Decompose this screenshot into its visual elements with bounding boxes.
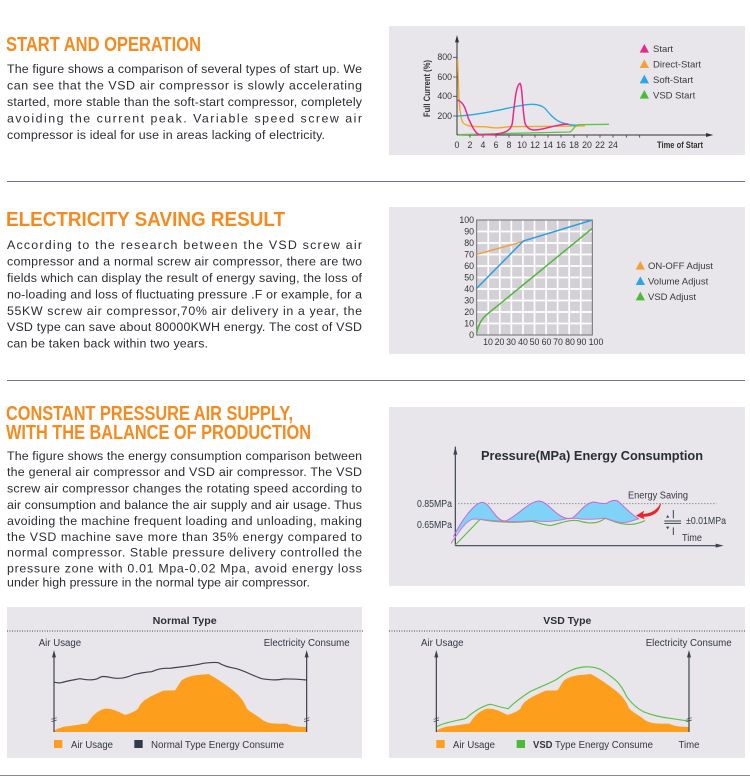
section: electricity saving result — [6, 207, 745, 354]
axis labels: start-up: 18 — [569, 140, 579, 150]
panel title: normal type: Normal Type — [153, 615, 217, 627]
text block: constant pressure air supply: avoiding the machine frequent loading and unloading, making — [7, 514, 362, 528]
panel: VSD type chart — [389, 607, 745, 758]
axis labels: start-up: 12 — [530, 140, 540, 150]
chart labels: pressure — [417, 490, 726, 544]
axis labels: energy adjust: 20 — [464, 307, 474, 317]
panel: energy adjust chart — [389, 207, 745, 354]
text block: electricity saving result: VSD type can save about 80000KWH energy. The cost of VSD — [7, 320, 362, 334]
text block: electricity saving result: can be taken back within two years. — [7, 336, 208, 350]
labels: VSD type — [421, 638, 732, 751]
labels: normal type: Electricity Consume — [264, 638, 350, 649]
grid and curves: energy adjust — [477, 220, 645, 335]
heading: electricity saving result: ELECTRICITY SAVING RESULT — [6, 209, 285, 231]
heading: start and operation: START AND OPERATION — [6, 34, 201, 56]
panel: start-up line chart — [389, 26, 745, 155]
text block: electricity saving result: According to the research between the VSD screw air — [7, 238, 362, 252]
text block: start and operation: started, more stable than the soft-start compressor, completely — [7, 95, 363, 109]
panel: normal type chart — [7, 607, 363, 758]
axis labels: start-up: 200 — [437, 111, 452, 121]
chart labels: pressure: ±0.01MPa — [686, 516, 726, 527]
axis labels: start-up: 0 — [455, 140, 460, 150]
axis labels: start-up: 20 — [582, 140, 592, 150]
text block: electricity saving result: fields which can display the result of energy saving, the loss of — [7, 271, 363, 285]
axis labels: start-up — [422, 52, 703, 150]
heading: constant pressure air supply: WITH THE BALANCE OF PRODUCTION — [6, 422, 311, 444]
axis labels: energy adjust: 90 — [577, 337, 586, 347]
text block: constant pressure air supply: normal compressor. Stable pressure delivery controlled the — [7, 546, 362, 560]
axis labels: start-up: 16 — [556, 140, 566, 150]
axis labels: energy adjust: 40 — [464, 284, 474, 294]
text block: constant pressure air supply — [7, 449, 362, 590]
legend: energy adjust: ON-OFF Adjust — [648, 261, 713, 272]
labels: VSD type: Air Usage — [453, 740, 495, 751]
labels: normal type: Air Usage — [71, 740, 113, 751]
labels: normal type: Normal Type Energy Consume — [151, 740, 284, 751]
axis labels: energy adjust: 60 — [464, 261, 474, 271]
labels: VSD type: Electricity Consume — [646, 638, 732, 649]
axis labels: start-up: 2 — [468, 140, 473, 150]
axis labels: start-up: 14 — [543, 140, 553, 150]
axis labels: energy adjust — [459, 215, 603, 347]
axis labels: energy adjust: 10 — [483, 337, 493, 347]
panel: pressure and energy consumption chart — [389, 407, 745, 586]
text block: start and operation: The figure shows a comparison of several types of start up. We — [7, 62, 362, 76]
heading: constant pressure air supply: CONSTANT PRESSURE AIR SUPPLY, — [6, 403, 293, 425]
chart curves and axes: VSD type — [434, 650, 692, 748]
axis labels: start-up: 22 — [595, 140, 605, 150]
axis labels: start-up: 4 — [481, 140, 486, 150]
legend: energy adjust — [648, 261, 713, 303]
labels: VSD type: Time — [678, 740, 700, 751]
text block: constant pressure air supply: screw air compressor changes the rotating speed according to — [7, 482, 362, 496]
text block: electricity saving result: 55KW screw air compressor,70% air delivery in a year, the — [7, 304, 362, 318]
legend: start-up — [653, 44, 701, 102]
labels: VSD type: VSD — [533, 740, 552, 751]
chart title: Pressure(MPa) Energy Consumption — [481, 448, 703, 463]
axis labels: energy adjust: 80 — [565, 337, 575, 347]
axis labels: start-up: Time of Start — [657, 140, 703, 150]
axis labels: start-up: 24 — [608, 140, 618, 150]
text block: constant pressure air supply: pressure zone with 0.01 Mpa-0.02 Mpa, avoid energy loss — [7, 562, 362, 576]
text block: start and operation: can see that the VSD air compressor is slowly accelerating — [7, 78, 362, 92]
axis labels: start-up: Full Current (%) — [422, 60, 432, 117]
chart labels: pressure: 0.65MPa — [417, 520, 452, 531]
text block: constant pressure air supply: the general air compressor and VSD air compressor. The VSD — [7, 465, 362, 479]
legend: start-up: VSD Start — [653, 90, 696, 102]
axis labels: energy adjust: 90 — [464, 226, 474, 236]
axis labels: energy adjust: 0 — [469, 330, 474, 340]
legend: energy adjust: VSD Adjust — [648, 292, 696, 303]
axis labels: start-up: 400 — [437, 91, 452, 101]
chart labels: pressure: 0.85MPa — [417, 499, 452, 510]
chart curves and axes: pressure — [451, 447, 724, 548]
text block: constant pressure air supply: air consumption and balance the air supply and air usage. Thus — [7, 498, 362, 512]
axis labels: energy adjust: 100 — [589, 337, 603, 347]
axis labels: energy adjust: 10 — [464, 318, 474, 328]
text block: start and operation — [7, 62, 363, 142]
axis labels: energy adjust: 40 — [518, 337, 528, 347]
chart curves and axes: start-up — [453, 35, 713, 138]
labels: VSD type: Type Energy Consume — [555, 740, 653, 751]
text block: start and operation: compressor is ideal for use in areas lacking of electricity. — [7, 128, 325, 142]
axis labels: energy adjust: 50 — [530, 337, 539, 347]
section: constant pressure air supply — [6, 403, 745, 758]
heading: constant pressure air supply — [6, 403, 311, 444]
axis labels: energy adjust: 30 — [506, 337, 516, 347]
section: start and operation — [6, 26, 745, 155]
axis labels: start-up: 800 — [437, 52, 452, 62]
chart labels: pressure: Time — [682, 533, 702, 544]
text block: constant pressure air supply: The figure shows the energy consumption comparison between — [7, 449, 362, 463]
axis labels: start-up: 10 — [517, 140, 527, 150]
axis labels: start-up: 8 — [507, 140, 512, 150]
text block: start and operation: avoiding the current peak. Variable speed screw air — [7, 112, 362, 126]
legend: energy adjust: Volume Adjust — [648, 276, 709, 288]
labels: VSD type: Air Usage — [421, 638, 464, 649]
text block: constant pressure air supply: under high pressure in the normal type air compressor. — [7, 576, 310, 590]
text block: electricity saving result: compressor and a normal screw air compressor, there are two — [7, 254, 362, 268]
legend: start-up: Soft-Start — [653, 75, 693, 86]
text block: electricity saving result — [7, 238, 363, 350]
axis labels: energy adjust: 20 — [495, 337, 504, 347]
legend: start-up: Direct-Start — [653, 60, 701, 70]
axis labels: energy adjust: 60 — [542, 337, 551, 347]
axis labels: start-up: 6 — [494, 140, 499, 150]
axis labels: energy adjust: 70 — [464, 250, 474, 260]
chart labels: pressure: Energy Saving — [628, 490, 688, 502]
axis labels: energy adjust: 70 — [553, 337, 563, 347]
chart curves and axes: normal type — [51, 650, 309, 748]
legend: start-up: Start — [653, 44, 673, 55]
axis labels: energy adjust: 80 — [464, 238, 474, 248]
axis labels: start-up: 600 — [437, 72, 452, 82]
labels: normal type — [39, 638, 350, 751]
text block: electricity saving result: no-loading and loss of fluctuating pressure .F or example, for a — [7, 288, 362, 302]
panel title: VSD type: VSD Type — [543, 615, 591, 627]
axis labels: energy adjust: 100 — [459, 215, 474, 225]
text block: constant pressure air supply: the VSD machine save more than 35% energy compared to — [7, 530, 362, 544]
labels: normal type: Air Usage — [39, 638, 82, 649]
axis labels: energy adjust: 30 — [464, 296, 474, 306]
axis labels: energy adjust: 50 — [464, 272, 474, 282]
